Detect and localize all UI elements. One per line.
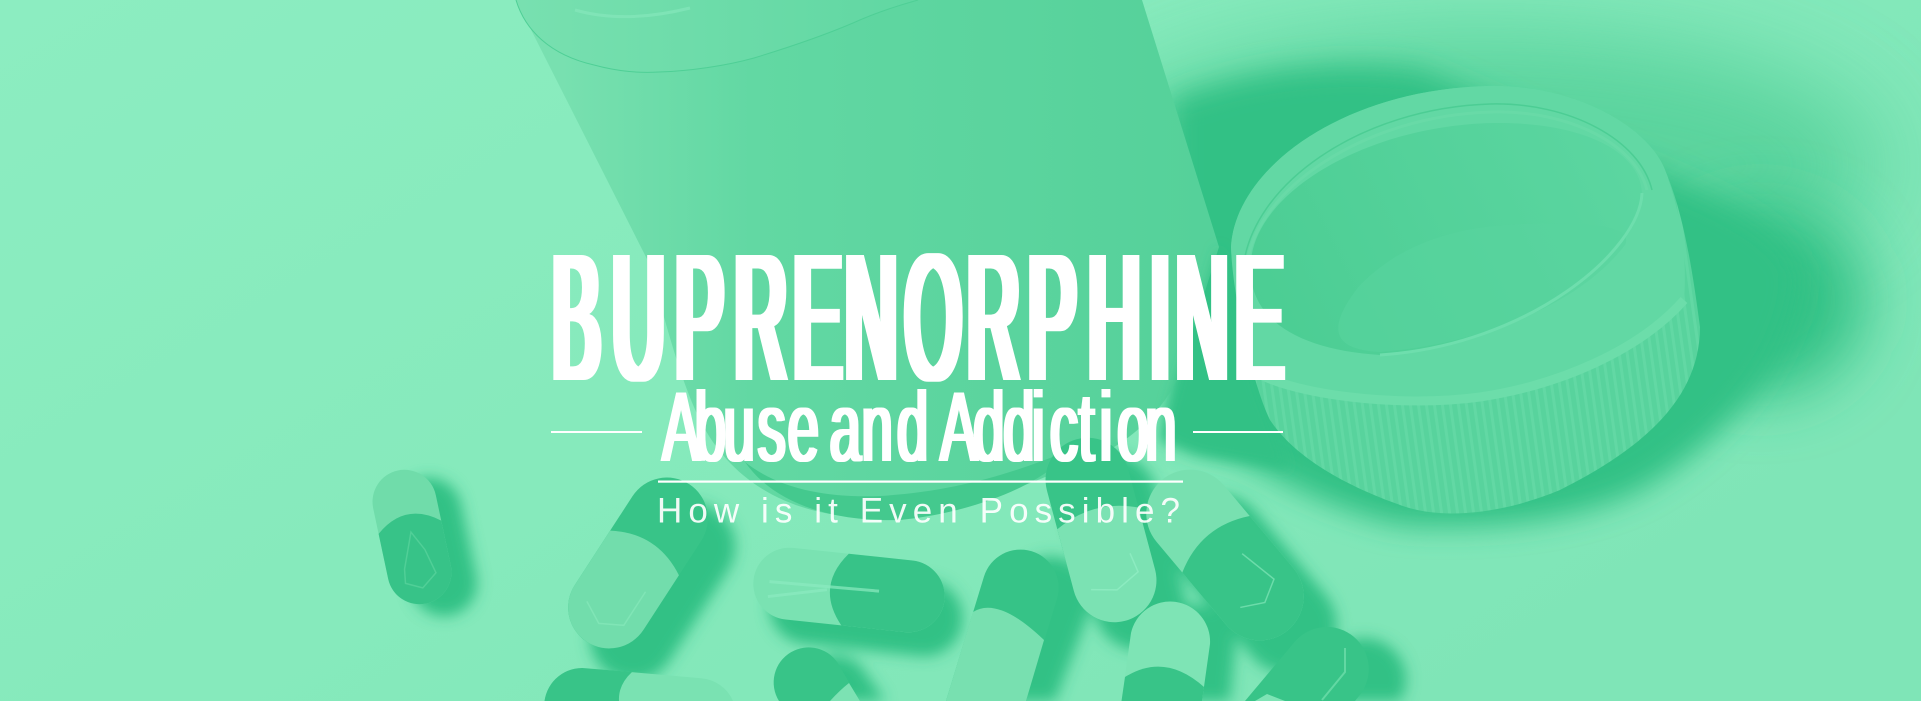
lid threads bbox=[1243, 104, 1652, 270]
lid lip highlight bbox=[1252, 300, 1684, 401]
title: BUPRENORPHINE: BUPRENORPHINE bbox=[552, 217, 1283, 419]
bottle cap bbox=[516, 0, 918, 72]
capsule 5 bbox=[1036, 428, 1166, 632]
shadow between bottle and lid bbox=[1160, 247, 1290, 470]
lid bbox=[1231, 86, 1700, 513]
capsule 9 bbox=[544, 668, 733, 701]
left rule bbox=[551, 431, 642, 433]
rule under subtitle bbox=[658, 480, 1183, 483]
capsule 2 bbox=[552, 462, 724, 664]
capsule shadows bbox=[390, 443, 1406, 701]
lid cast shadow bbox=[1080, 30, 1880, 527]
right rule bbox=[1193, 431, 1283, 433]
lid ribbed body bbox=[1231, 86, 1700, 513]
tagline: How is it Even Possible?: How is it Even Possible? bbox=[657, 492, 1180, 530]
capsule 10 bbox=[774, 647, 860, 701]
lid upper collar bbox=[1231, 86, 1685, 402]
subtitle: Abuse and Addiction: Abuse and Addiction bbox=[662, 372, 1176, 483]
capsule 3 bbox=[750, 544, 948, 636]
capsule 8 bbox=[1245, 627, 1369, 701]
bottle base rim bbox=[745, 450, 1070, 520]
lid opening bbox=[1251, 123, 1642, 355]
capsule 4 bbox=[946, 550, 1059, 701]
capsule 1 bbox=[367, 464, 457, 610]
capsule 6 bbox=[1128, 452, 1322, 658]
capsule 7 bbox=[1122, 602, 1210, 701]
bottle bbox=[516, 0, 1219, 520]
